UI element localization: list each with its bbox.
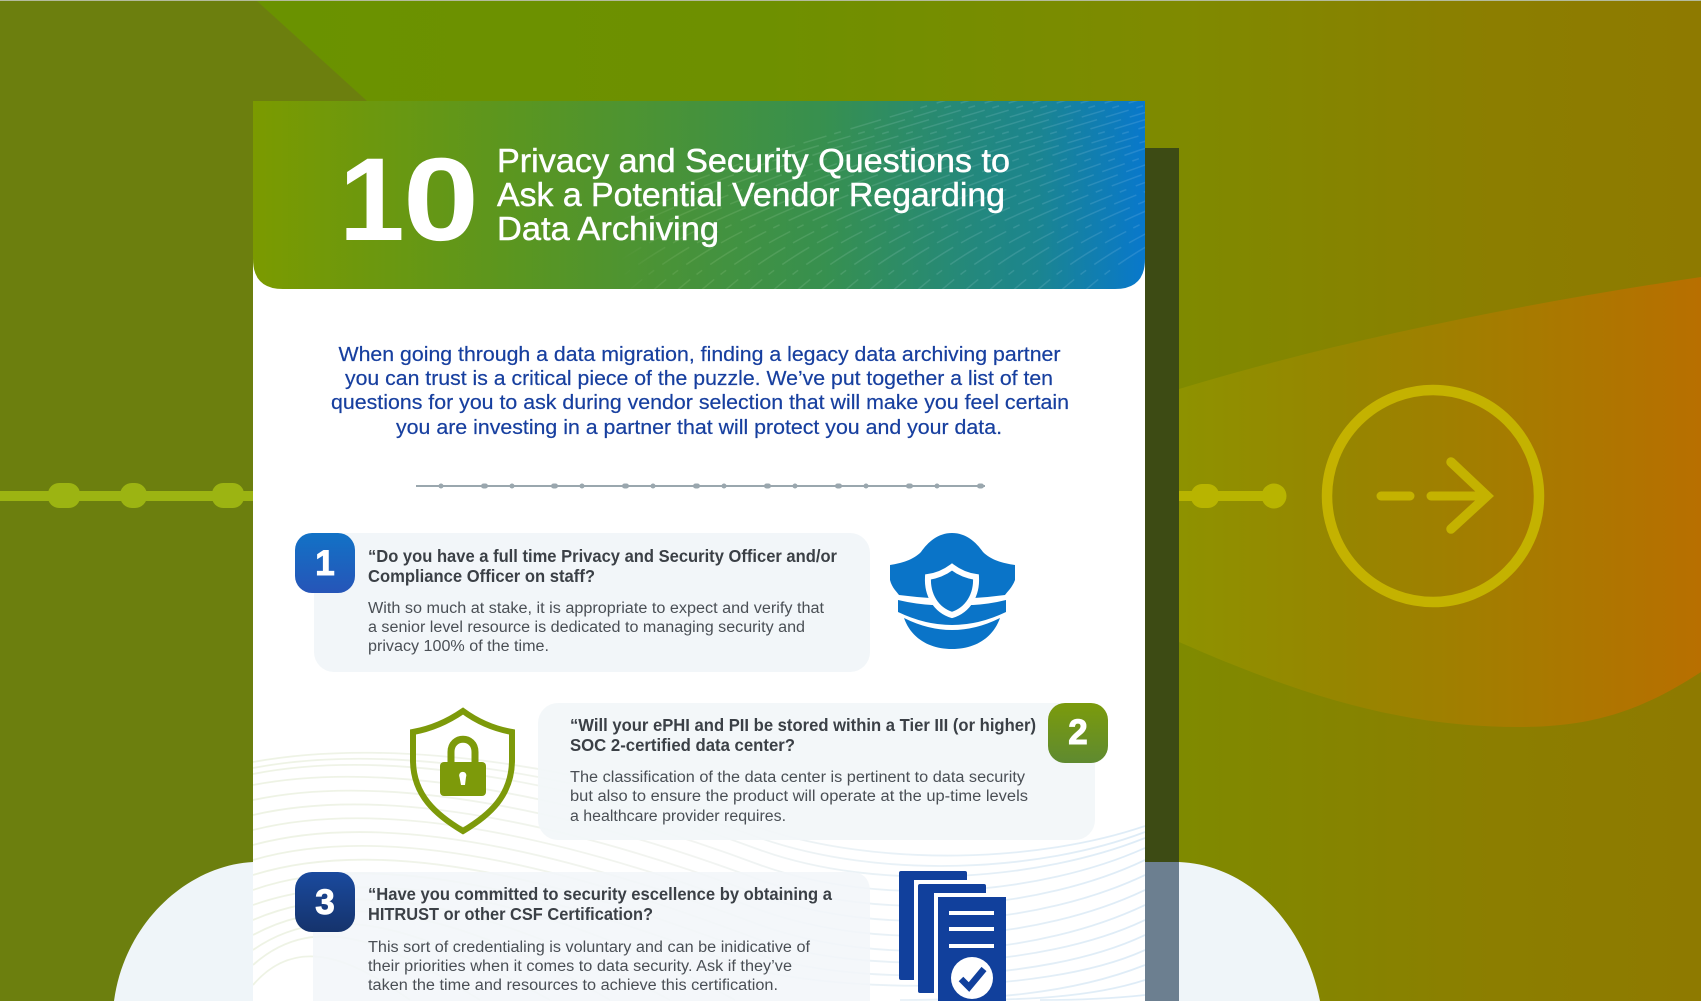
wave pattern — [253, 753, 1145, 1000]
title number: 0 — [403, 134, 479, 266]
icon: arrow in circle — [1327, 390, 1539, 602]
question 2 heading: SOC 2-certified data center? — [570, 735, 795, 755]
title number — [339, 134, 479, 266]
question 1 heading: “Do you have a full time Privacy and Security Officer and/or — [368, 546, 837, 566]
question 3 background — [313, 872, 870, 1001]
question 2 background — [538, 703, 1095, 840]
right connector line — [1179, 484, 1286, 508]
panel: question 1 — [295, 533, 870, 672]
intro paragraph: When going through a data migration, finding a legacy data archiving partner — [338, 343, 1061, 366]
question 3 body: taken the time and resources to achieve this certification. — [368, 977, 778, 994]
badge 1 — [295, 533, 355, 593]
card shadow strip — [1145, 148, 1179, 1001]
question 2 body: a healthcare provider requires. — [570, 808, 786, 825]
header banner — [253, 101, 1145, 289]
intro paragraph: questions for you to ask during vendor selection that will make you feel certain — [331, 391, 1069, 414]
question 1 heading — [368, 546, 837, 586]
icon: officer hat — [890, 533, 1015, 649]
bottom right cloud — [1100, 862, 1320, 1001]
question 2 body — [570, 769, 1028, 825]
question 3 heading: HITRUST or other CSF Certification? — [368, 904, 653, 924]
intro paragraph: you can trust is a critical piece of the puzzle. We’ve put together a list of ten — [345, 367, 1053, 390]
question 2 heading — [570, 715, 1036, 755]
badge 2: 2 — [1068, 713, 1088, 752]
title text: Data Archiving — [497, 210, 719, 247]
bottom left cloud — [114, 862, 400, 1001]
card background — [253, 101, 1145, 1001]
question 1 body — [368, 600, 825, 655]
badge 3 — [295, 872, 355, 932]
question 3 heading: “Have you committed to security escellence by obtaining a — [368, 884, 832, 904]
question 3 body — [368, 939, 811, 994]
question 2 body: The classification of the data center is pertinent to data security — [570, 769, 1025, 786]
title text — [497, 142, 1010, 247]
intro paragraph: you are investing in a partner that will protect you and your data. — [396, 416, 1002, 439]
question 2 body: but also to ensure the product will operate at the up-time levels — [570, 788, 1028, 805]
panel: question 2 — [538, 703, 1108, 840]
question 1 body: With so much at stake, it is appropriate to expect and verify that — [368, 600, 825, 617]
question 1 heading: Compliance Officer on staff? — [368, 566, 595, 586]
question 1 background — [314, 533, 870, 672]
left connector line — [0, 483, 253, 508]
badge 3: 3 — [315, 883, 335, 922]
title number: 1 — [339, 134, 405, 266]
badge 1: 1 — [315, 544, 335, 583]
icon: documents with check — [899, 871, 1006, 1001]
question 3 body: their priorities when it comes to data security. Ask if they’ve — [368, 958, 792, 975]
panel: question 3 — [295, 872, 870, 1001]
dotted divider — [416, 484, 985, 488]
badge 2 — [1048, 703, 1108, 763]
intro paragraph — [331, 343, 1069, 439]
question 3 body: This sort of credentialing is voluntary and can be inidicative of — [368, 939, 811, 956]
question 3 heading — [368, 884, 832, 924]
question 1 body: privacy 100% of the time. — [368, 638, 549, 655]
icon: shield with lock — [413, 711, 512, 831]
title text: Ask a Potential Vendor Regarding — [497, 176, 1005, 213]
question 2 heading: “Will your ePHI and PII be stored within a Tier III (or higher) — [570, 715, 1036, 735]
title text: Privacy and Security Questions to — [497, 142, 1010, 179]
question 1 body: a senior level resource is dedicated to managing security and — [368, 619, 805, 636]
